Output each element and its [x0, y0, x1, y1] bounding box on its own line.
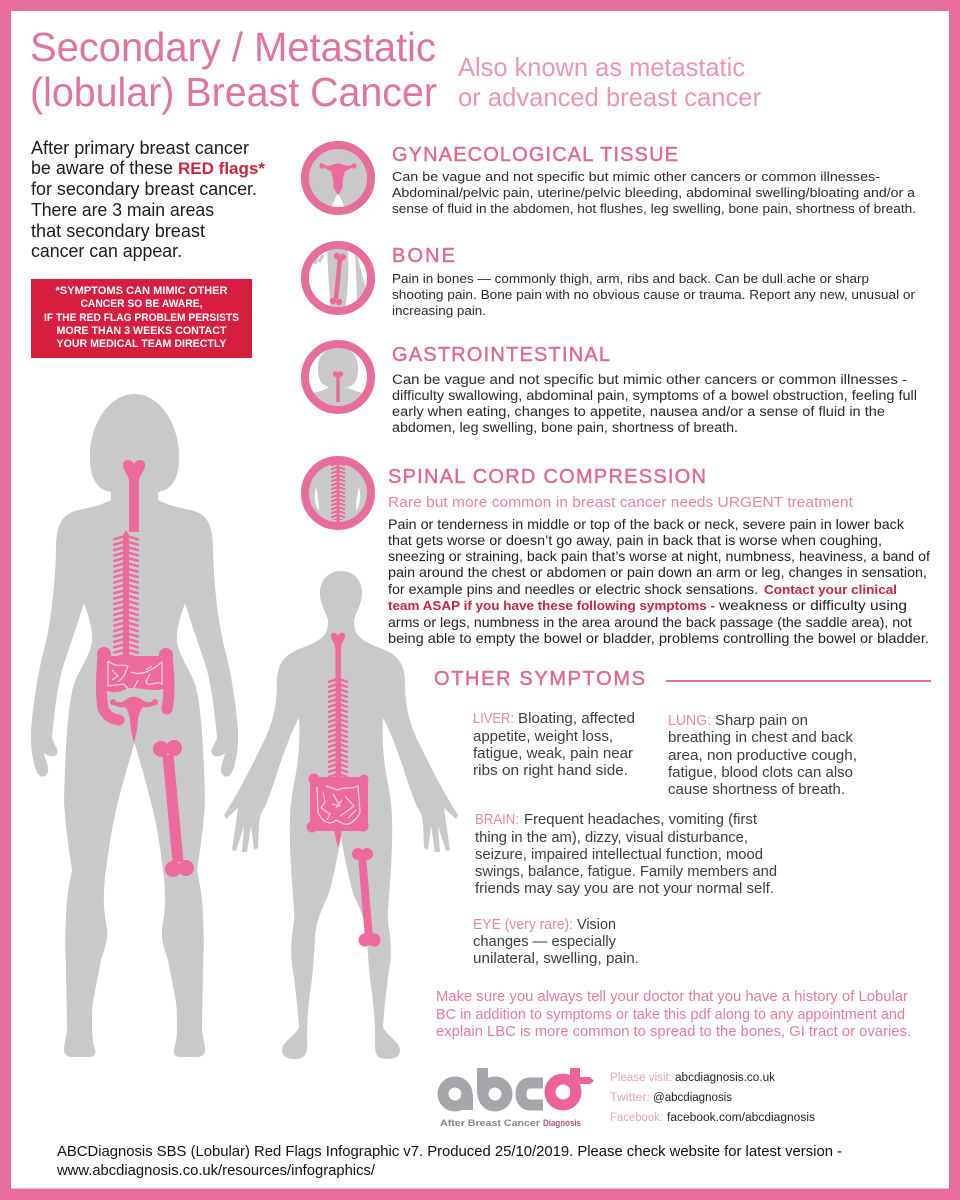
uterus: [110, 697, 158, 743]
spinal cord compression section: Rare but more common in breast cancer needs URGENT treatment: [388, 495, 853, 511]
doctor note: [436, 988, 911, 1040]
bone section: BONE: [392, 245, 455, 267]
female figure: [31, 394, 238, 1057]
colon and small intestine: [306, 774, 368, 848]
gynaecological tissue section: Abdominal/pelvic pain, uterine/pelvic bleeding, abdominal swelling/bloating and/or a: [392, 185, 916, 200]
eye: unilateral, swelling, pain.: [473, 951, 639, 967]
icon: spinal cord: [305, 460, 371, 526]
warning box: *SYMPTOMS CAN MIMIC OTHER: [56, 285, 228, 297]
intro text: After primary breast cancer: [31, 138, 249, 158]
gynaecological tissue section: Can be vague and not specific but mimic other cancers or common illnesses-: [392, 169, 880, 184]
spinal cord compression section: SPINAL CORD COMPRESSION: [388, 466, 706, 488]
intro text: [31, 138, 265, 261]
contact details: facebook.com/abcdiagnosis: [667, 1112, 815, 1124]
contact details: @abcdiagnosis: [653, 1092, 732, 1104]
spine: [328, 633, 348, 786]
contact details: Twitter:: [610, 1092, 650, 1104]
spinal cord compression section: team ASAP if you have these following symptoms -: [388, 598, 715, 613]
spinal cord compression section: Contact your clinical: [764, 582, 897, 597]
intro text: RED flags*: [178, 159, 265, 178]
liver: [473, 711, 635, 779]
title: Secondary / Metastatic: [30, 24, 436, 70]
eye: changes — especially: [473, 934, 617, 950]
logo: After Breast Cancer: [440, 1118, 540, 1129]
lung: LUNG:: [668, 713, 711, 729]
subtitle: [458, 52, 761, 112]
silhouette: female body: [31, 394, 238, 1057]
subtitle: Also known as metastatic: [458, 52, 745, 82]
spinal cord compression section: for example pins and needles or electric shock sensations.: [388, 581, 758, 597]
eye: [473, 917, 639, 967]
gastrointestinal section: difficulty swallowing, abdominal pain, symptoms of a bowel obstruction, feeling full: [392, 388, 917, 404]
warning box: YOUR MEDICAL TEAM DIRECTLY: [56, 338, 227, 350]
spinal cord compression section: being able to empty the bowel or bladder, problems controlling the bowel or bladder.: [388, 630, 929, 646]
warning box: CANCER SO BE AWARE,: [80, 298, 202, 310]
lung: Sharp pain on: [715, 713, 808, 729]
footer text: ABCDiagnosis SBS (Lobular) Red Flags Infographic v7. Produced 25/10/2019. Please check website for latest version -: [57, 1144, 842, 1160]
gynaecological tissue section: sense of fluid in the abdomen, hot flushes, leg swelling, bone pain, shortness of breath.: [392, 201, 916, 216]
subtitle: or advanced breast cancer: [458, 82, 761, 112]
icon: bone: [305, 245, 371, 311]
logo: Diagnosis: [543, 1118, 581, 1129]
brain: Frequent headaches, vomiting (first: [524, 812, 757, 828]
spinal cord compression section: Pain or tenderness in middle or top of the back or neck, severe pain in lower back: [388, 516, 905, 532]
intro text: for secondary breast cancer.: [31, 179, 257, 199]
title: (lobular) Breast Cancer: [30, 69, 437, 115]
icon: gynaecological tissue: [305, 145, 371, 211]
intro text: cancer can appear.: [31, 241, 182, 261]
femur: [153, 740, 194, 877]
contact details: Please visit:: [610, 1072, 672, 1084]
spine: [113, 460, 145, 662]
bone section: increasing pain.: [392, 303, 486, 318]
warning box: MORE THAN 3 WEEKS CONTACT: [56, 325, 227, 337]
bone section: Pain in bones — commonly thigh, arm, ribs and back. Can be dull ache or sharp: [392, 271, 869, 286]
contact details: Facebook:: [610, 1112, 663, 1124]
silhouette: male body: [224, 571, 458, 1059]
intro text: There are 3 main areas: [31, 200, 214, 220]
icon: gastrointestinal: [304, 344, 372, 412]
other symptoms heading: OTHER SYMPTOMS: [434, 668, 645, 690]
warning box: [31, 279, 252, 358]
intro text: that secondary breast: [31, 221, 205, 241]
bone section: [392, 245, 916, 318]
spinal cord compression section: that gets worse or doesn’t go away, pain in back that is worse when coughing,: [388, 532, 882, 548]
doctor note: Make sure you always tell your doctor that you have a history of Lobular: [436, 988, 908, 1005]
brain: thing in the am), dizzy, visual disturbance,: [475, 830, 748, 846]
bone section: shooting pain. Bone pain with no obvious cause or trauma. Report any new, unusual or: [392, 287, 916, 302]
lung: cause shortness of breath.: [668, 782, 845, 798]
brain: seizure, impaired intellectual function, mood: [475, 847, 763, 863]
spinal cord compression section: [388, 466, 930, 646]
lung: area, non productive cough,: [668, 748, 857, 764]
gastrointestinal section: abdomen, leg swelling, bone pain, shortness of breath.: [392, 420, 738, 436]
femur: [352, 848, 380, 946]
intro text: be aware of these: [31, 158, 173, 178]
spinal cord compression section: pain around the chest or abdomen or pain down an arm or leg, changes in sensation,: [388, 564, 927, 580]
brain: [475, 812, 777, 897]
gastrointestinal section: early when eating, changes to appetite, nausea and/or a sense of fluid in the: [392, 404, 885, 420]
logo: [440, 1068, 594, 1129]
gynaecological tissue section: [392, 144, 916, 216]
liver: LIVER:: [473, 711, 514, 727]
gastrointestinal section: [392, 344, 917, 436]
doctor note: explain LBC is more common to spread to the bones, GI tract or ovaries.: [436, 1023, 911, 1040]
brain: friends may say you are not your normal self.: [475, 881, 774, 897]
gynaecological tissue section: GYNAECOLOGICAL TISSUE: [392, 144, 678, 166]
contact details: abcdiagnosis.co.uk: [675, 1072, 775, 1084]
liver: fatigue, weak, pain near: [473, 746, 633, 762]
eye: Vision: [577, 917, 616, 933]
brain: swings, balance, fatigue. Family members and: [475, 864, 777, 880]
footer text: [56, 1144, 842, 1179]
doctor note: BC in addition to symptoms or take this pdf along to any appointment and: [436, 1006, 905, 1023]
liver: appetite, weight loss,: [473, 729, 613, 745]
lung: breathing in chest and back: [668, 730, 854, 746]
warning box: IF THE RED FLAG PROBLEM PERSISTS: [44, 312, 239, 324]
title: [30, 24, 437, 115]
eye: EYE (very rare):: [473, 917, 573, 933]
contact details: [610, 1072, 815, 1124]
liver: ribs on right hand side.: [473, 763, 628, 779]
male figure: [224, 571, 458, 1059]
spinal cord compression section: arms or legs, numbness in the area around the back passage (the saddle area), not: [388, 614, 912, 630]
colon and small intestine: [97, 647, 173, 720]
spinal cord compression section: weakness or difficulty using: [718, 597, 907, 613]
lung: [668, 713, 857, 798]
gastrointestinal section: Can be vague and not specific but mimic other cancers or common illnesses -: [392, 372, 907, 388]
spinal cord compression section: sneezing or straining, back pain that’s worse at night, numbness, heaviness, a band of: [388, 548, 930, 564]
brain: BRAIN:: [475, 812, 519, 828]
footer text: www.abcdiagnosis.co.uk/resources/infographics/: [56, 1163, 376, 1179]
gastrointestinal section: GASTROINTESTINAL: [392, 344, 610, 366]
liver: Bloating, affected: [518, 711, 635, 727]
lung: fatigue, blood clots can also: [668, 765, 853, 781]
